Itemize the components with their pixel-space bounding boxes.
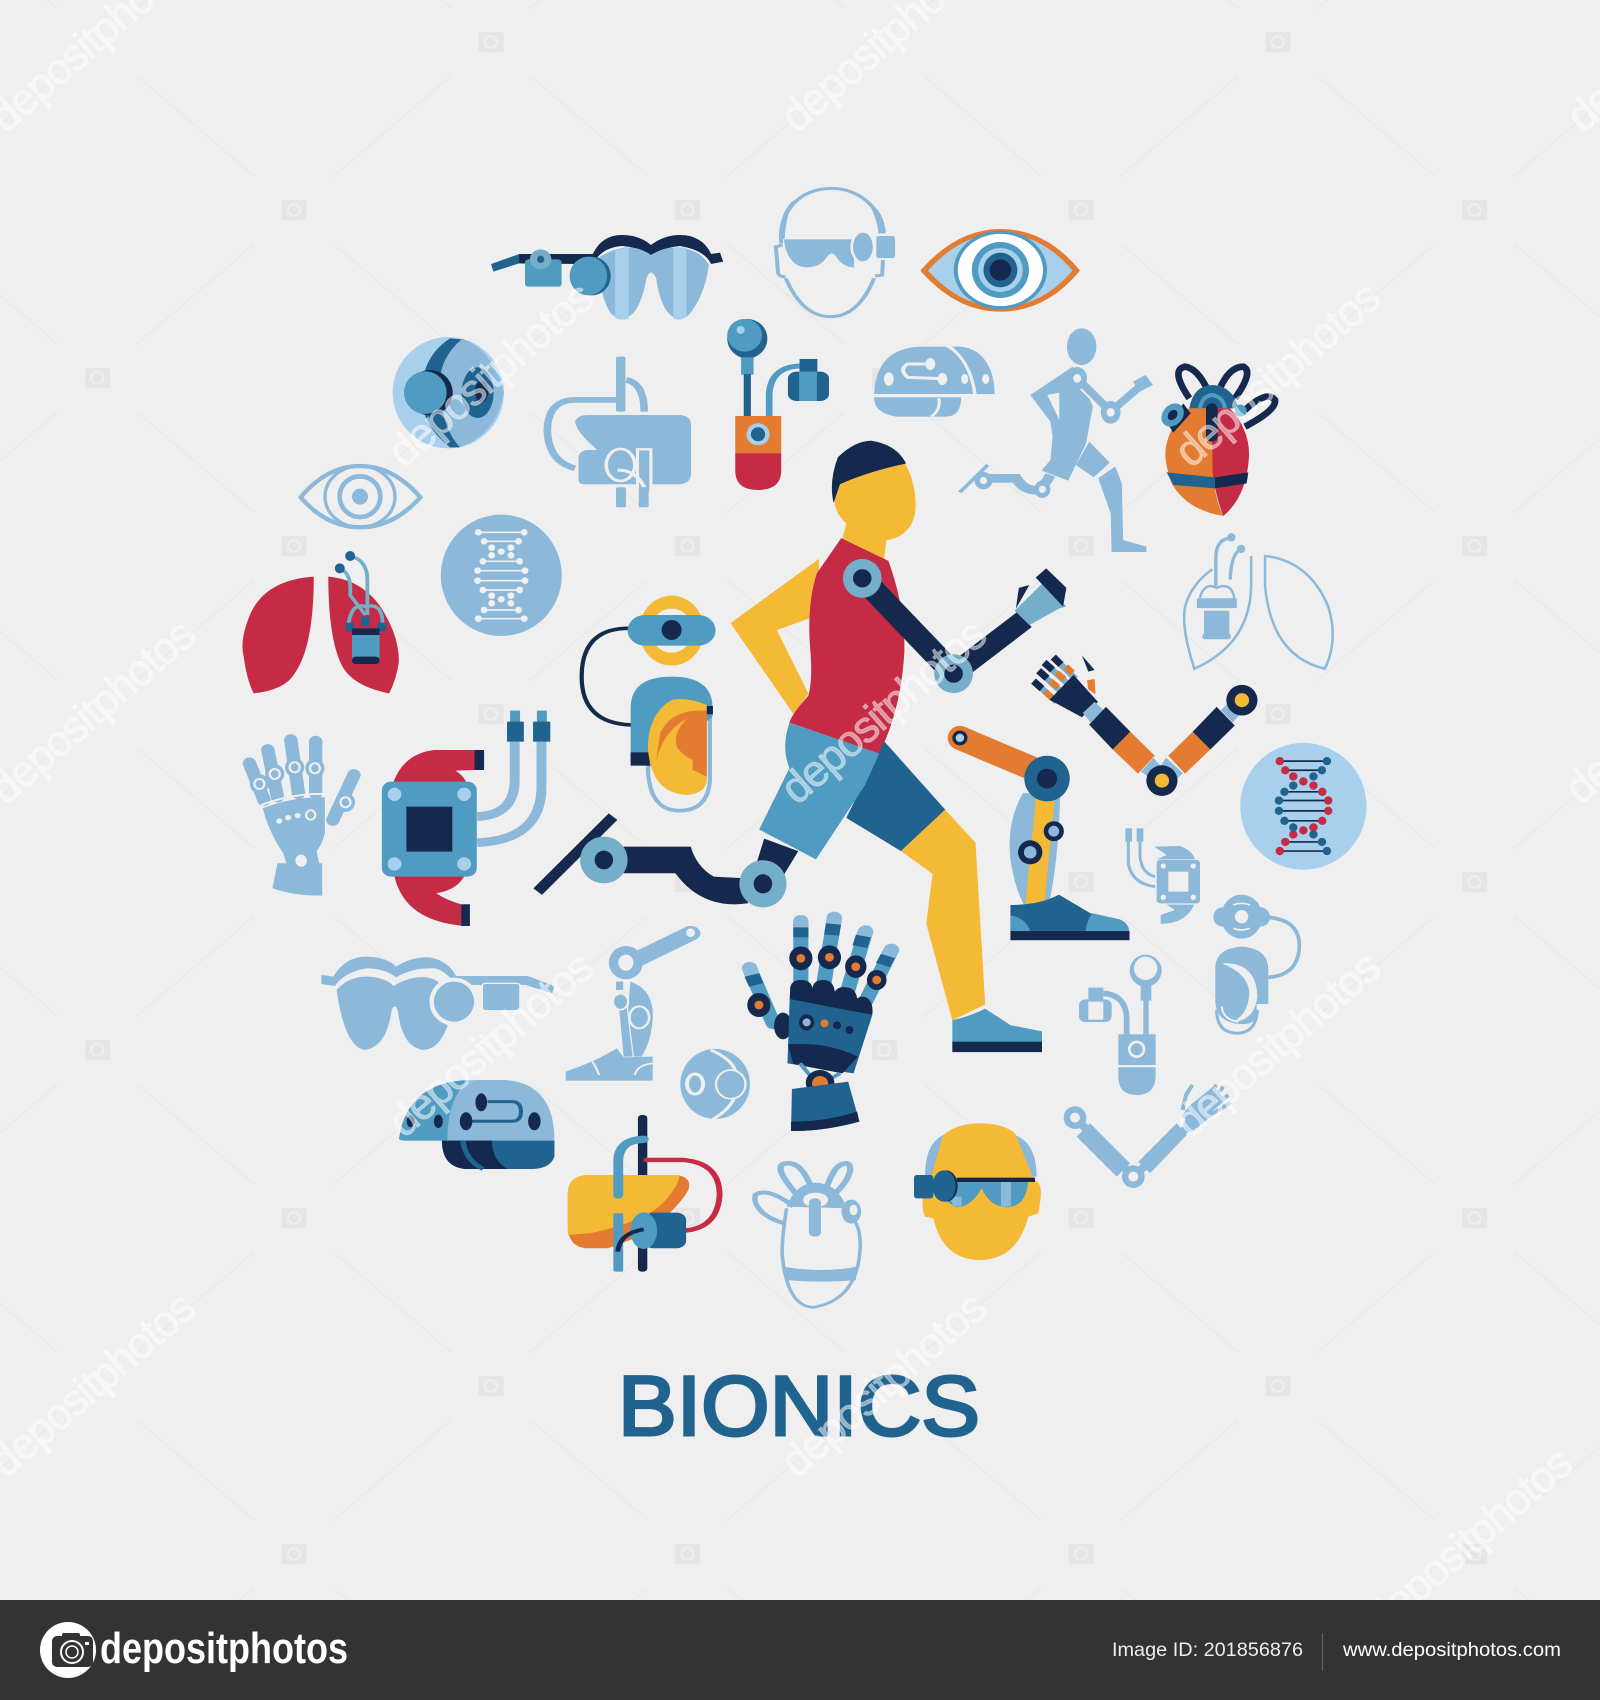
icon: yellow head with goggles xyxy=(914,1123,1041,1260)
icon: small ear device light xyxy=(1213,895,1299,1033)
watermark text: depositphotos xyxy=(378,942,603,1147)
icon: bionic disc xyxy=(393,337,504,448)
footer logo xyxy=(40,1622,348,1678)
knee joint xyxy=(739,860,787,907)
icon: arm with hand light xyxy=(1064,1085,1230,1188)
front shoe xyxy=(952,1009,1042,1043)
icon: prosthetic leg navy xyxy=(538,817,748,904)
icon: dark helmet headset xyxy=(399,1080,554,1169)
icon: outline eye xyxy=(301,466,420,527)
website: www.depositphotos.com xyxy=(1342,1639,1561,1661)
thigh prosthesis link xyxy=(756,839,798,876)
icon: small eyeball light xyxy=(680,1049,750,1119)
watermark text: depositphotos xyxy=(1165,942,1390,1147)
icon: heart device with tubes xyxy=(382,711,550,926)
icon: stomach device xyxy=(547,357,691,507)
icon: coloured heart xyxy=(1157,367,1275,516)
icon: cochlear ear device xyxy=(582,596,716,811)
icon: small pump light xyxy=(1079,955,1162,1095)
icon: dark smart glasses xyxy=(491,235,723,320)
back arm xyxy=(731,559,819,714)
icon: DNA circle coloured xyxy=(1240,743,1367,870)
front leg xyxy=(901,810,985,1020)
icon: orange knee prosthesis xyxy=(952,730,1130,940)
watermark text: depositphotos xyxy=(771,1282,996,1487)
footer bar xyxy=(0,1600,1600,1700)
watermark text: depositphotos xyxy=(1357,1438,1582,1643)
watermark text: depositphotos xyxy=(771,609,996,814)
icon: robotic hand dark xyxy=(747,917,891,1131)
head and neck xyxy=(834,464,916,559)
shorts front xyxy=(759,723,879,859)
image id: Image ID: 201856876 xyxy=(1112,1639,1303,1661)
icon: bionic eye orange xyxy=(924,231,1076,309)
title: BIONICS xyxy=(618,1359,980,1453)
icon: running figure light xyxy=(960,328,1153,552)
main figure: runner with bionic limbs xyxy=(731,441,1066,1052)
watermark text: depositphotos xyxy=(1165,272,1390,477)
red shirt xyxy=(789,538,904,754)
icon: outline lungs xyxy=(1184,533,1333,669)
icon: DNA circle light xyxy=(441,515,562,636)
icon: small heart device light xyxy=(1125,828,1200,924)
icon: head outline with goggles xyxy=(776,188,895,317)
bionic arm xyxy=(843,559,1066,693)
icon: red lungs with device xyxy=(242,551,399,693)
watermark text: depositphotos xyxy=(378,272,603,477)
shorts back xyxy=(846,741,945,851)
footer logo: depositphotos xyxy=(100,1624,348,1673)
icon: light glasses xyxy=(321,957,554,1050)
hair xyxy=(832,441,906,503)
icon: small leg prosthesis light xyxy=(566,928,696,1081)
icon: liver device xyxy=(568,1115,720,1272)
icon: light prosthetic hand xyxy=(249,740,355,896)
icon: implant pump xyxy=(727,319,829,490)
icon: outline heart xyxy=(755,1163,861,1307)
icon: light headset brain xyxy=(874,347,995,417)
icon: robotic arm with hand xyxy=(1034,655,1257,796)
